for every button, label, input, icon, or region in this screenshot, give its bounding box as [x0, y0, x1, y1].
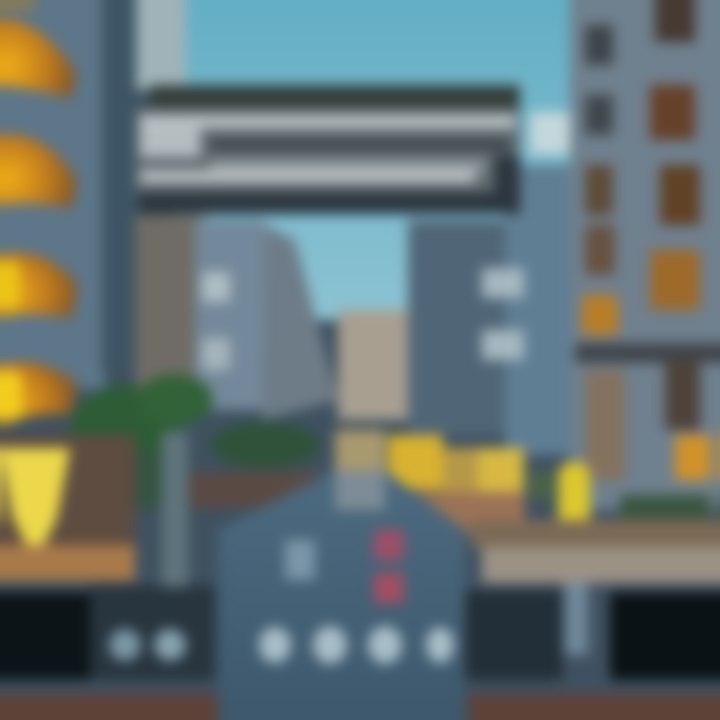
right building — [570, 0, 720, 510]
gold domes on left facade — [0, 0, 78, 428]
banner lettering bands — [140, 115, 515, 182]
sunlit shopfronts — [335, 430, 710, 532]
yellow lamp left — [0, 448, 70, 545]
lower right storefront — [465, 520, 720, 680]
red road marking — [374, 530, 404, 603]
lower left storefront — [0, 432, 215, 680]
crosswalk highlights — [109, 626, 533, 664]
foreground pavement — [0, 694, 720, 720]
overhead banner — [135, 85, 520, 214]
yellow street lamp right — [558, 462, 590, 655]
road surface — [109, 470, 533, 720]
building windows — [575, 0, 720, 480]
left building — [0, 0, 186, 390]
street trees — [70, 374, 320, 510]
mid-distance buildings — [135, 165, 570, 455]
